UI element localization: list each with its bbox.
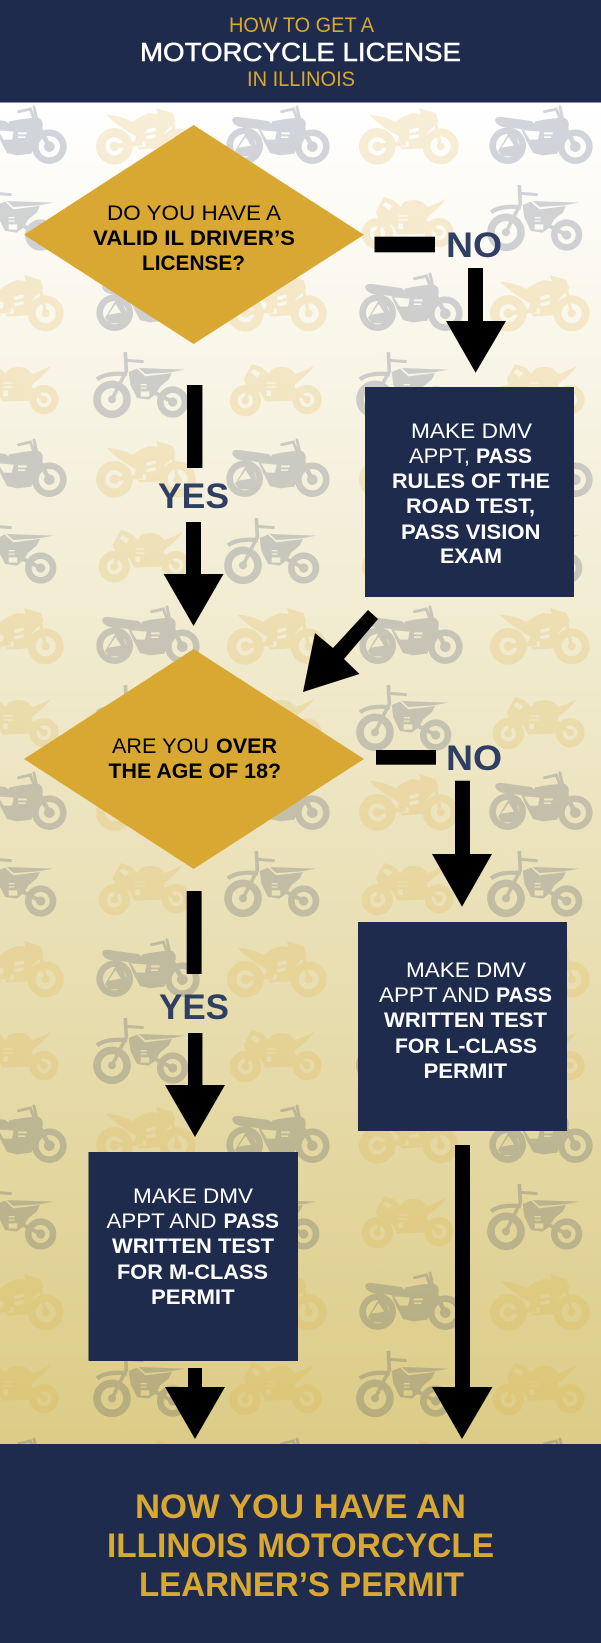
header banner [0, 0, 601, 103]
box text: PERMIT [151, 1285, 235, 1309]
box text: PASS [496, 983, 552, 1007]
box text: RULES OF THE [392, 469, 550, 493]
title: how to get a: HOW TO GET A [229, 14, 374, 37]
title: motorcycle license: MOTORCYCLE LICENSE [140, 37, 461, 67]
no label: NO [446, 225, 502, 265]
yes connector 1 [158, 385, 229, 516]
arrow: no to dmv appointment [446, 268, 506, 373]
question text: LICENSE? [142, 251, 245, 275]
yes label: YES [159, 987, 229, 1027]
question text: VALID IL DRIVER’S [93, 226, 295, 250]
box text: MAKE DMV [406, 958, 527, 982]
box: m-class permit [88, 1152, 298, 1361]
box text: MAKE DMV [411, 419, 533, 443]
box text: EXAM [440, 544, 502, 568]
arrow: m-class box to result [165, 1368, 225, 1439]
box text: APPT, [409, 444, 470, 468]
box text [379, 958, 552, 1083]
box: rules of the road [365, 387, 574, 597]
footer text: LEARNER’S PERMIT [139, 1566, 464, 1604]
no connector 1 [374, 225, 502, 265]
diagonal arrow: dmv box to second question [303, 610, 378, 692]
box text [106, 1184, 279, 1309]
box text: WRITTEN TEST [384, 1008, 547, 1032]
box text: PASS [476, 444, 532, 468]
box: l-class permit [358, 922, 567, 1131]
arrow: no to l-class box [432, 781, 492, 907]
box text: WRITTEN TEST [112, 1234, 274, 1258]
box text: FOR L-CLASS [395, 1034, 537, 1058]
box text: ROAD TEST, [406, 494, 535, 518]
arrow: l-class box to result [432, 1145, 492, 1439]
box text: APPT AND [379, 983, 490, 1007]
box text: PASS [224, 1209, 279, 1233]
box text: MAKE DMV [133, 1184, 254, 1208]
question text: DO YOU HAVE A [107, 201, 282, 225]
question text: OVER [216, 734, 277, 758]
footer text: ILLINOIS MOTORCYCLE [107, 1527, 494, 1565]
question text: ARE YOU [112, 734, 209, 758]
footer text: NOW YOU HAVE AN [135, 1488, 466, 1526]
box text [392, 419, 550, 568]
box text: PASS VISION [401, 520, 540, 544]
no connector 2 [376, 738, 502, 778]
decision diamond: over the age of 18 [24, 649, 364, 869]
yes label: YES [158, 476, 229, 516]
footer text [107, 1488, 494, 1604]
yes connector 2 [159, 891, 229, 1027]
footer banner [0, 1444, 601, 1643]
question text: THE AGE OF 18? [108, 759, 281, 783]
decision diamond: valid driver's license [24, 125, 364, 344]
arrow: yes to m-class box [165, 1033, 225, 1137]
question text [108, 734, 281, 783]
box text: PERMIT [424, 1059, 507, 1083]
title: in illinois: IN ILLINOIS [247, 68, 355, 91]
box text: FOR M-CLASS [117, 1260, 268, 1284]
box text: APPT AND [106, 1209, 216, 1233]
question text [93, 201, 295, 275]
no label: NO [446, 738, 502, 778]
arrow: yes to second question [164, 522, 224, 626]
